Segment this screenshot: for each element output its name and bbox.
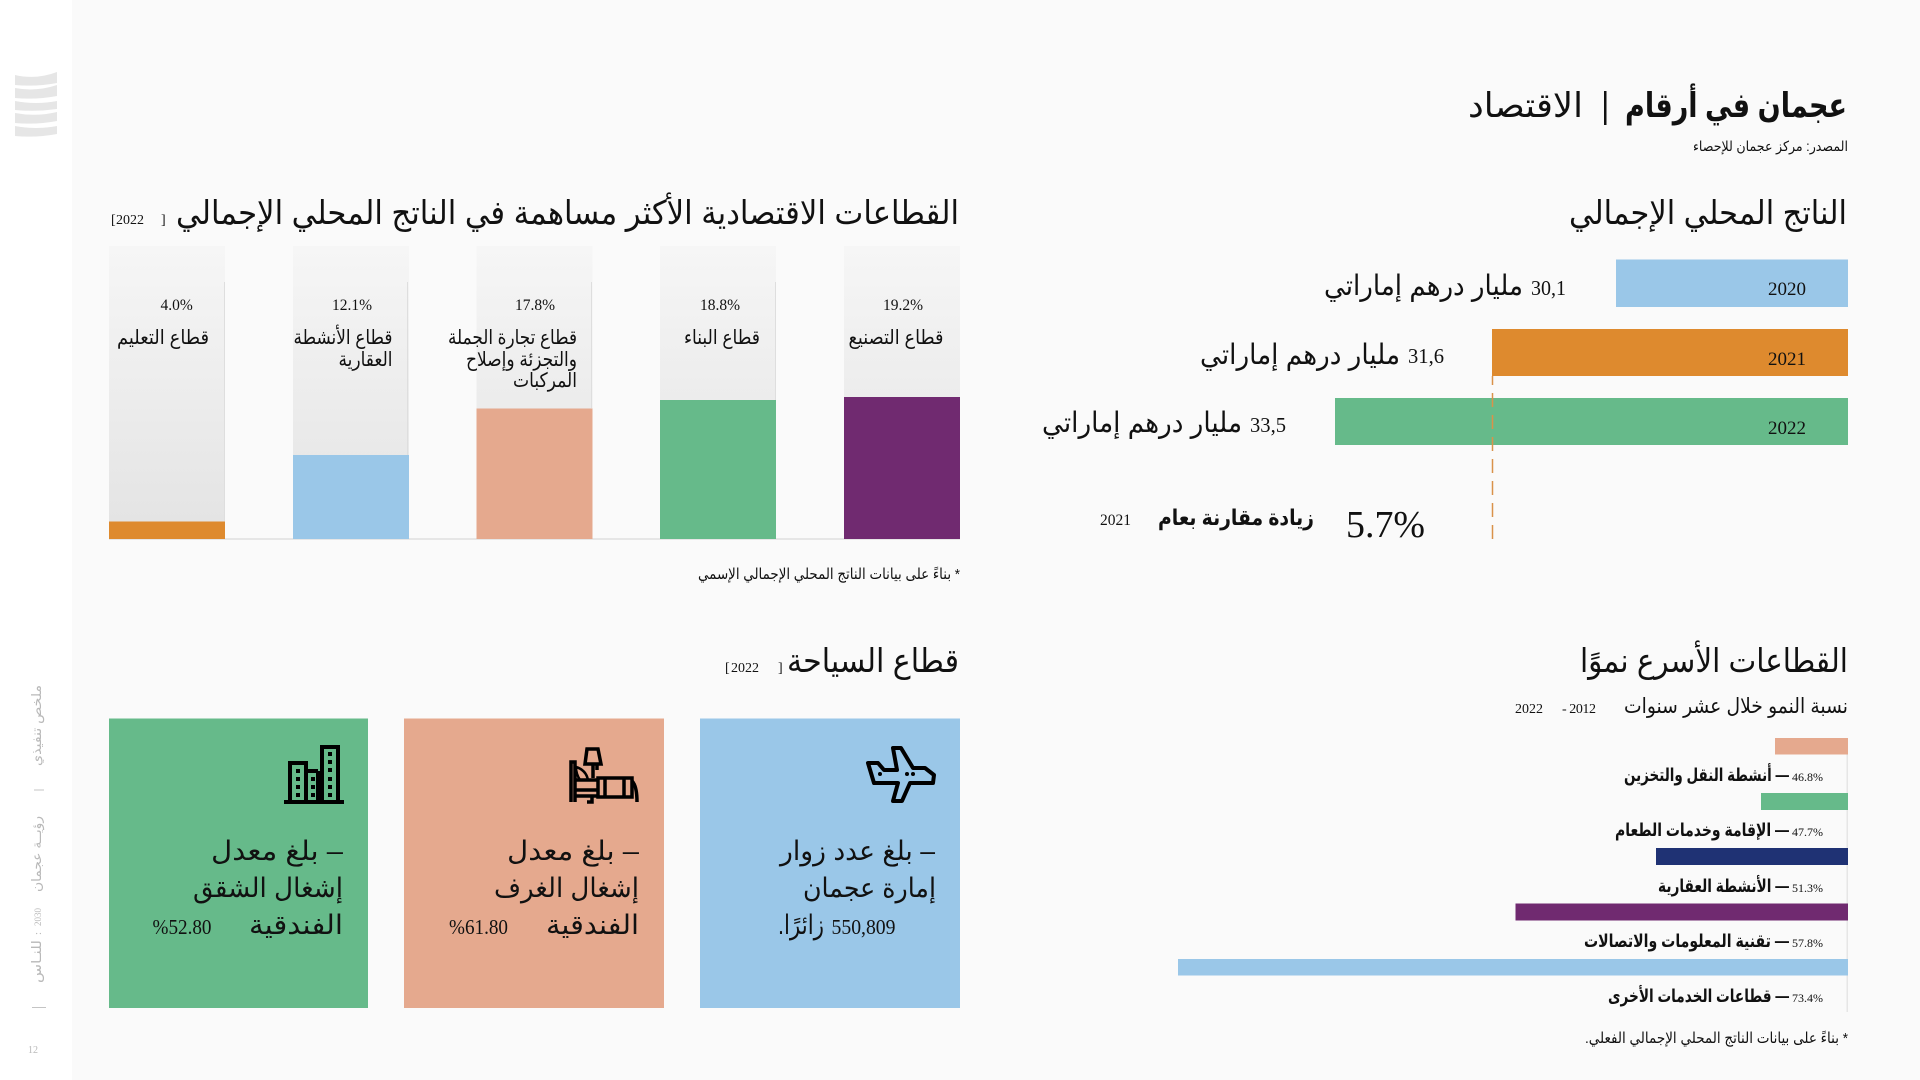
title: الاقتصاد — [1468, 87, 1583, 125]
icon: buildings — [284, 747, 344, 804]
bar 2022 — [1335, 398, 1848, 445]
sidebar text: for people: للنـاس — [29, 940, 45, 983]
heading: top sectors: ] — [161, 213, 166, 228]
card: hotel rooms: إشغال الغرف — [494, 873, 639, 904]
bar: other services: — قطاعات الخدمات الأخرى — [1608, 985, 1789, 1007]
heading: tourism — [725, 642, 959, 680]
card: hotel apartments: الفندقية — [249, 910, 343, 940]
card: visitors: زائرًا. — [778, 910, 824, 941]
sidebar text: colon: : — [32, 932, 44, 935]
bar: ICT: — تقنية المعلومات والاتصالات — [1584, 931, 1789, 952]
card: visitors: – بلغ عدد زوار — [778, 836, 935, 867]
heading: GDP: الناتج المحلي الإجمالي — [1569, 194, 1847, 232]
bar: other services — [1178, 959, 1848, 1007]
bar: transport: — أنشطة النقل والتخزين — [1624, 763, 1789, 786]
bar: real estate — [1656, 848, 1848, 896]
callout: growth — [1100, 504, 1425, 546]
sidebar text: 2030: 2030 — [33, 908, 43, 926]
panel: tourism — [109, 642, 960, 1008]
bar: accommodation — [1615, 793, 1848, 841]
column: trade: 17.8% — [515, 297, 555, 314]
subheading: growth period: نسبة النمو خلال عشر سنوات — [1624, 695, 1848, 718]
label 2021 value: 31,6 — [1408, 344, 1444, 368]
heading: top sectors: القطاعات الاقتصادية الأكثر مساهمة في الناتج المحلي الإجمالي — [176, 192, 959, 232]
bar: real estate: — الأنشطة العقارية — [1658, 875, 1789, 896]
column: education: 4.0% — [160, 297, 193, 314]
subheading: growth period: 2022 — [1515, 702, 1543, 717]
callout: growth: 5.7% — [1346, 504, 1425, 546]
bar: ICT — [1516, 904, 1848, 952]
label 2022 value: مليار درهم إماراتي — [1042, 407, 1242, 439]
card: hotel apartments: – بلغ معدل — [211, 836, 343, 867]
column: construction: قطاع البناء — [684, 327, 760, 349]
card: hotel rooms: – بلغ معدل — [507, 836, 639, 867]
bar: transport: 46.8% — [1792, 770, 1823, 784]
column: education: قطاع التعليم — [117, 327, 209, 349]
column: real estate: 12.1% — [332, 297, 372, 314]
column: trade: قطاع تجارة الجملة — [448, 327, 577, 349]
subheading: growth period — [1515, 695, 1848, 718]
heading: top sectors: 2022 — [116, 213, 144, 228]
title — [1468, 83, 1847, 126]
footnote: real GDP: * بناءً على بيانات الناتج المحلي الإجمالي الفعلي. — [1585, 1030, 1848, 1048]
column: trade: المركبات — [513, 370, 577, 392]
label 2022 value: 33,5 — [1250, 413, 1286, 437]
sidebar text: vision: رؤيــة عجمان — [29, 816, 45, 892]
column: manufacturing: 19.2% — [883, 297, 923, 314]
subheading: growth period: - 2012 — [1562, 702, 1596, 717]
card: visitors: إمارة عجمان — [803, 873, 936, 904]
label 2020 value: 30,1 — [1531, 276, 1566, 300]
heading: tourism: 2022 — [731, 661, 759, 676]
column: manufacturing — [844, 246, 960, 539]
bar: other services: 73.4% — [1792, 991, 1823, 1005]
card: visitors — [700, 718, 960, 1008]
bar: transport — [1624, 738, 1848, 786]
panel: fastest growing sectors — [1178, 640, 1848, 1048]
heading: tourism: قطاع السياحة — [787, 642, 959, 680]
bar 2020 — [1616, 260, 1848, 307]
sidebar — [0, 0, 72, 1080]
column: trade — [448, 246, 592, 539]
page number: 12 — [28, 1045, 38, 1056]
icon: sidebar logo — [15, 72, 57, 137]
column: construction — [660, 246, 776, 539]
bar: accommodation: 47.7% — [1792, 825, 1823, 839]
label 2020 value: مليار درهم إماراتي — [1324, 270, 1523, 302]
column: construction: 18.8% — [700, 297, 740, 314]
heading: tourism: ] — [778, 661, 783, 676]
column: real estate: قطاع الأنشطة — [294, 325, 392, 349]
card: hotel apartments — [109, 718, 368, 1008]
dashed reference line — [1492, 376, 1494, 539]
bar: ICT: 57.8% — [1792, 936, 1823, 950]
icon: plane — [868, 748, 934, 801]
heading: tourism: [ — [725, 661, 730, 676]
column: real estate: العقارية — [338, 349, 392, 371]
heading: fastest growing: القطاعات الأسرع نموًا — [1580, 640, 1848, 680]
card: hotel rooms — [404, 718, 664, 1008]
label 2021 value: مليار درهم إماراتي — [1200, 339, 1400, 371]
bar 2021 — [1492, 329, 1848, 376]
callout: growth: 2021 — [1100, 512, 1131, 529]
column: manufacturing: قطاع التصنيع — [848, 327, 944, 349]
column: education — [109, 246, 225, 539]
source note: المصدر: مركز عجمان للإحصاء — [1693, 138, 1848, 155]
card: hotel rooms: الفندقية — [546, 910, 639, 940]
icon: bed and lamp — [571, 749, 637, 802]
bar: accommodation: — الإقامة وخدمات الطعام — [1615, 820, 1789, 841]
heading: top sectors: [ — [111, 213, 116, 228]
panel: GDP — [1042, 194, 1848, 546]
bar: real estate: 51.3% — [1792, 881, 1823, 895]
sidebar text: executive summary: ملخص تنفيذي — [29, 685, 45, 766]
title: عجمان في أرقام — [1625, 83, 1847, 126]
footnote: nominal GDP: * بناءً على بيانات الناتج المحلي الإجمالي الإسمي — [698, 566, 960, 584]
bar 2021: 2021 — [1768, 349, 1806, 370]
card: hotel rooms: %61.80 — [449, 915, 508, 939]
callout: growth: زيادة مقارنة بعام — [1158, 505, 1314, 530]
column: real estate — [293, 246, 409, 539]
card: hotel apartments: إشغال الشقق — [193, 873, 343, 904]
bar 2020: 2020 — [1768, 279, 1806, 300]
column: trade: والتجزئة وإصلاح — [466, 349, 577, 372]
bar 2022: 2022 — [1768, 418, 1806, 439]
card: hotel apartments: %52.80 — [152, 915, 212, 939]
card: visitors: 550,809 — [832, 915, 896, 939]
panel: top sectors — [109, 192, 960, 584]
